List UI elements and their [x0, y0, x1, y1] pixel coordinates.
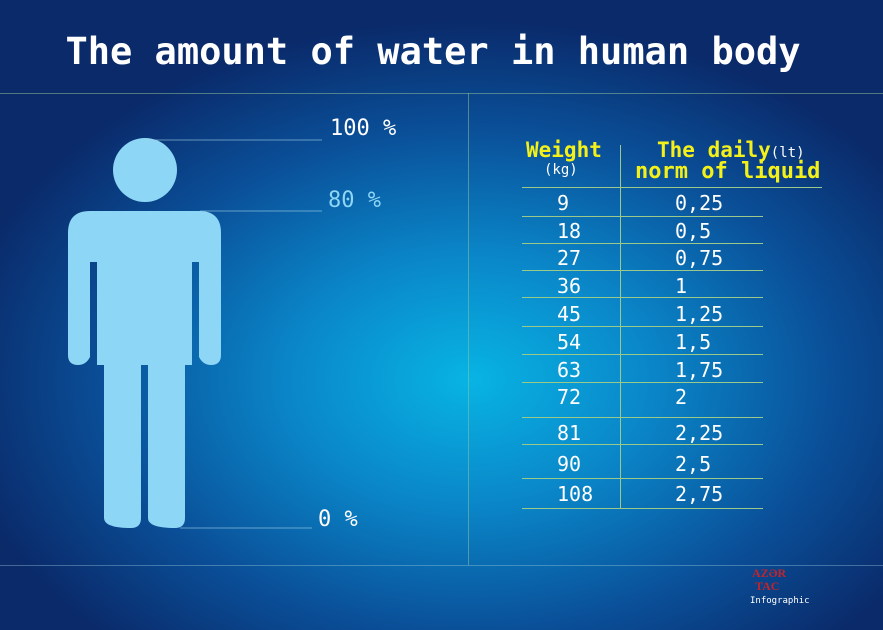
- logo: TAC: [755, 579, 779, 593]
- table: 81: [557, 421, 581, 445]
- table: 0,5: [675, 219, 711, 243]
- logo: [750, 566, 810, 606]
- table: 54: [557, 330, 581, 354]
- table: 2,25: [675, 421, 723, 445]
- table: The daily(lt): [657, 138, 805, 162]
- table: 18: [557, 219, 581, 243]
- logo: AZƏR: [752, 566, 786, 580]
- table: 9: [557, 191, 569, 215]
- human figure: [68, 138, 322, 528]
- table: 1,75: [675, 358, 723, 382]
- table: 2: [675, 385, 687, 409]
- table: 0,25: [675, 191, 723, 215]
- table: 108: [557, 482, 593, 506]
- title: The amount of water in human body: [65, 30, 801, 73]
- text: 0 %: [318, 507, 358, 532]
- table: 27: [557, 246, 581, 270]
- table: 1,25: [675, 302, 723, 326]
- table: norm of liquid: [635, 159, 820, 184]
- table: 90: [557, 452, 581, 476]
- table: 1,5: [675, 330, 711, 354]
- table: Weight: [526, 138, 602, 162]
- table: 36: [557, 274, 581, 298]
- table: 1: [675, 274, 687, 298]
- text: 80 %: [328, 188, 381, 213]
- percent labels: 100 %: [330, 116, 396, 141]
- table: 2,5: [675, 452, 711, 476]
- table: 0,75: [675, 246, 723, 270]
- table: 63: [557, 358, 581, 382]
- table: (kg): [544, 162, 578, 178]
- logo: Infographic: [750, 596, 810, 606]
- table: 2,75: [675, 482, 723, 506]
- table: 72: [557, 385, 581, 409]
- table: 45: [557, 302, 581, 326]
